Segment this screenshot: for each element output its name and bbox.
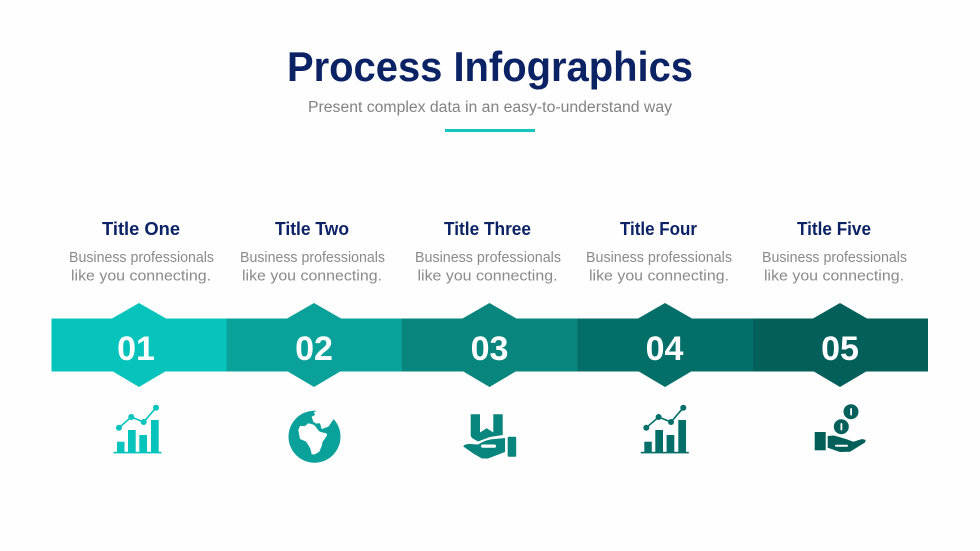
step 1 heading: Title One: [102, 219, 180, 239]
step 3 heading: Title Three: [444, 219, 531, 239]
step 4 bar segment: [578, 318, 754, 372]
step 5 heading: Title Five: [797, 219, 871, 239]
step 4: Title Four: [578, 219, 754, 453]
step 2: Title Two: [226, 219, 402, 463]
step 5 description: Business professionals: [762, 250, 907, 266]
step 1 description: Business professionals: [69, 250, 214, 266]
step 2 bar segment: [226, 318, 402, 372]
step 2 hexagon badge: [287, 303, 341, 387]
step 1: Title One: [52, 219, 226, 453]
step 3 description: like you connecting.: [418, 268, 558, 284]
step 4 description: like you connecting.: [589, 268, 729, 284]
icon: growth chart: [641, 405, 689, 453]
step 5 bar segment: [753, 318, 928, 372]
step 3 description: Business professionals: [415, 250, 561, 266]
icon: hand with coins: [815, 404, 866, 452]
step 3: Title Three: [402, 219, 578, 458]
step 5 hexagon badge: [813, 303, 867, 387]
step 1 bar segment: [52, 318, 226, 372]
step 1 hexagon badge: [112, 303, 166, 387]
step 3 number: 03: [471, 330, 508, 368]
subtitle: Present complex data in an easy-to-understand way: [308, 99, 672, 116]
step 1 description: like you connecting.: [71, 268, 211, 284]
step 5 number: 05: [821, 330, 859, 368]
step 2 description: Business professionals: [240, 250, 385, 266]
icon: hand holding box: [463, 414, 516, 458]
step 4 hexagon badge: [638, 303, 692, 387]
step 1 description: [69, 250, 214, 284]
step 5: Title Five: [753, 219, 928, 452]
step 4 heading: Title Four: [620, 219, 697, 239]
step 2 description: [240, 250, 385, 284]
step 2 description: like you connecting.: [242, 268, 382, 284]
step 5 description: [762, 250, 907, 284]
step 3 description: [415, 250, 561, 284]
step 3 bar segment: [402, 318, 578, 372]
step 3 hexagon badge: [462, 303, 516, 387]
icon: growth chart: [114, 405, 162, 453]
icon: globe: [288, 410, 340, 463]
step 4 description: Business professionals: [586, 250, 732, 266]
title: Process Infographics: [287, 43, 693, 90]
step 1 number: 01: [117, 330, 155, 368]
step 4 description: [586, 250, 732, 284]
step 2 heading: Title Two: [275, 219, 349, 239]
title underline accent: [445, 129, 535, 132]
step 4 number: 04: [646, 330, 683, 368]
step 2 number: 02: [295, 330, 333, 368]
step 5 description: like you connecting.: [764, 268, 904, 284]
